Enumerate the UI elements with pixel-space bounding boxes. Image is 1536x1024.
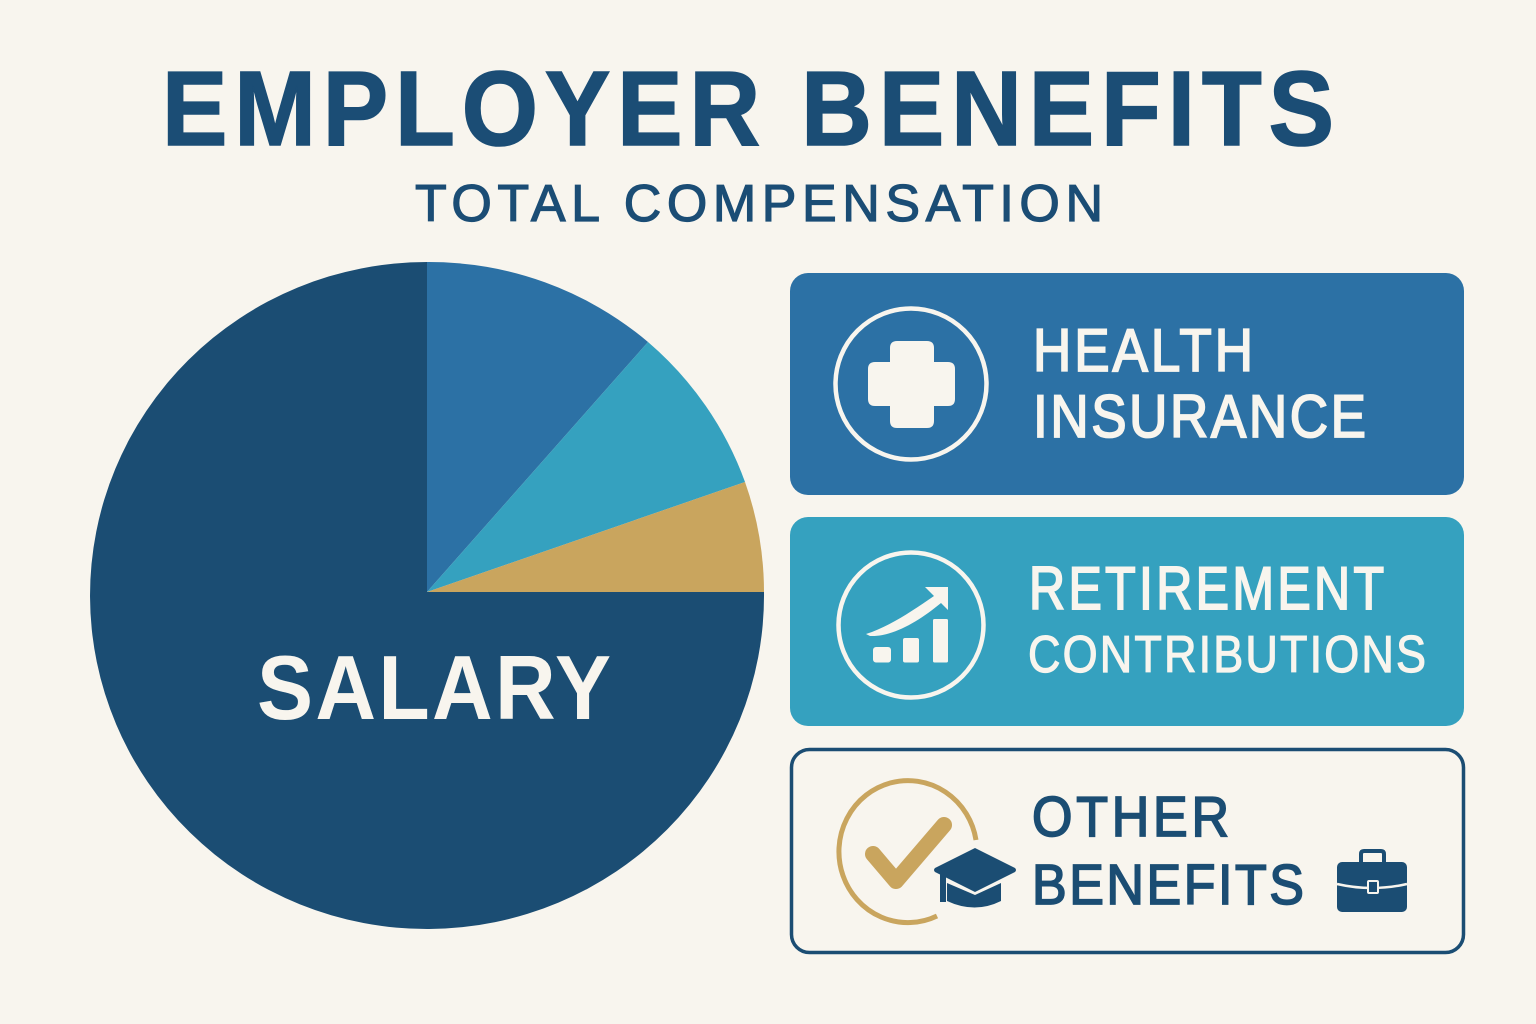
panel background	[790, 517, 1464, 726]
label: other benefits	[1032, 786, 1304, 916]
panel: health insurance	[790, 273, 1464, 495]
title: EMPLOYER BENEFITS	[162, 50, 1334, 168]
label: other benefits: OTHER	[1032, 786, 1229, 848]
pie slice: health insurance	[427, 262, 648, 592]
panel: other benefits	[792, 750, 1464, 952]
icon: medical cross	[836, 308, 986, 460]
icon: growth chart	[838, 552, 984, 698]
label: health insurance	[1033, 318, 1366, 451]
label: retirement contributions: RETIREMENT	[1029, 555, 1384, 622]
icon: briefcase	[1337, 851, 1407, 912]
panel background	[790, 273, 1464, 495]
subtitle: TOTAL COMPENSATION	[415, 175, 1103, 233]
panel: retirement contributions	[790, 517, 1464, 726]
pie slice: other benefits	[427, 482, 764, 592]
label: retirement contributions	[1028, 555, 1426, 684]
icon: graduation cap	[934, 848, 1016, 908]
pie label: salary: SALARY	[257, 637, 611, 739]
pie slice: retirement contributions	[427, 342, 745, 592]
label: health insurance: INSURANCE	[1033, 384, 1366, 451]
icon: gold check mark	[839, 781, 976, 923]
pie chart: total compensation	[90, 262, 764, 929]
panel background	[792, 750, 1464, 952]
label: retirement contributions: CONTRIBUTIONS	[1028, 626, 1426, 684]
label: other benefits: BENEFITS	[1032, 854, 1304, 916]
pie slice: salary	[90, 262, 764, 929]
label: health insurance: HEALTH	[1033, 318, 1253, 385]
